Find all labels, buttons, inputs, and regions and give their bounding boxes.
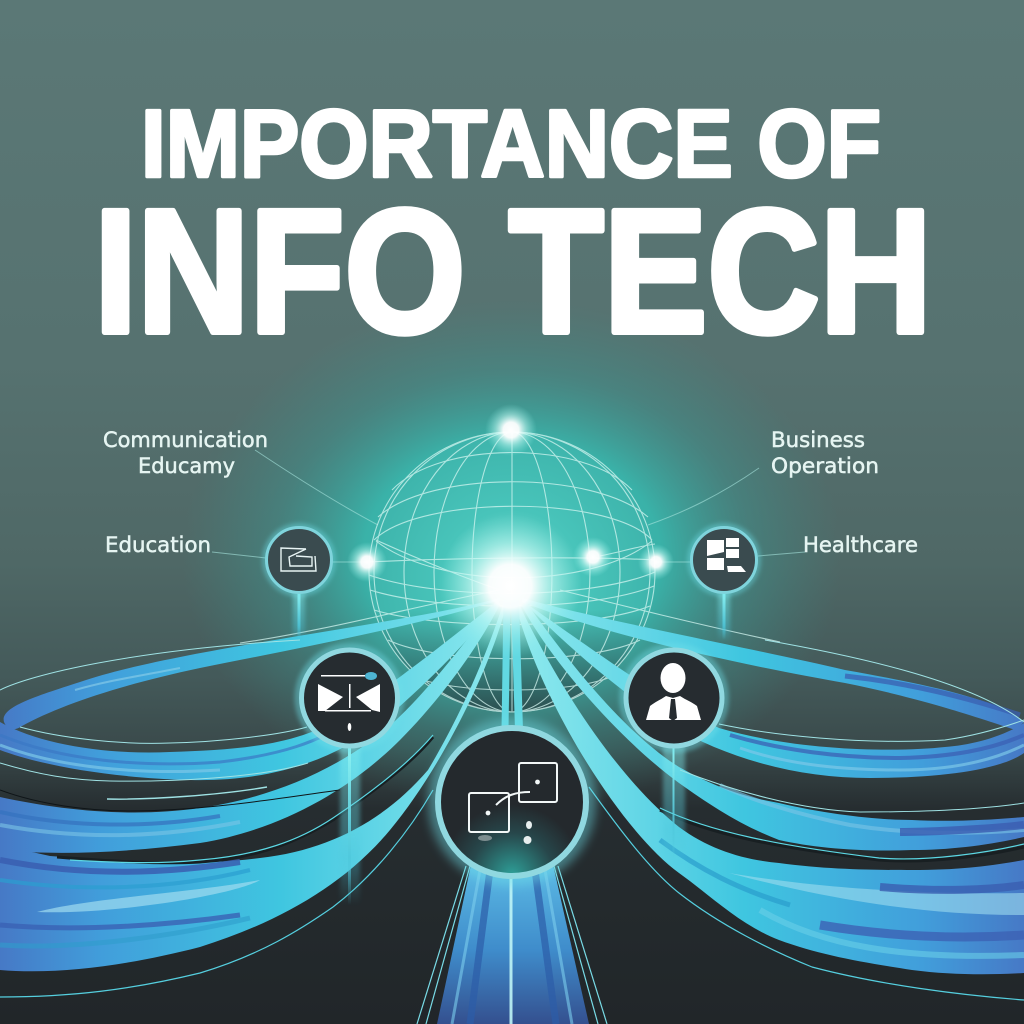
pin: healthcare: [718, 592, 730, 642]
ribbon streaks left: [0, 668, 350, 946]
label: Education: Education: [105, 533, 211, 557]
globe body: [369, 432, 655, 712]
icon: education document: [281, 548, 316, 571]
thin lines left: [0, 640, 433, 997]
fan body: [437, 860, 589, 1024]
pin: left node: [340, 745, 360, 905]
pin: right node: [663, 745, 685, 865]
icon: person in suit: [646, 663, 701, 721]
globe bottom fade: [369, 432, 655, 712]
ribbon streaks right: [660, 676, 1024, 956]
title line 2: INFO TECH: [94, 174, 932, 370]
lower left ribbons: [0, 598, 506, 997]
title: [94, 90, 932, 370]
hub flare: [438, 514, 582, 658]
label: Business: Business: [771, 428, 865, 452]
icon: window grid: [707, 538, 746, 572]
icon node: communication: [294, 643, 404, 753]
ribbon: lower-left band: [0, 604, 506, 971]
ribbon: lower-right band: [516, 606, 1024, 974]
node: left: [347, 542, 387, 582]
icon: connected squares: [469, 763, 557, 844]
title line 1: IMPORTANCE OF: [141, 90, 881, 198]
ribbon: upper-right arc: [522, 598, 1024, 730]
center rays from hub: [505, 600, 519, 730]
icon node: healthcare: [687, 523, 761, 597]
pin: education: [293, 592, 305, 642]
label: Operation: Operation: [771, 454, 879, 478]
label: Communication: Communication: [103, 428, 268, 452]
icon node: business person: [619, 643, 729, 753]
label: Healthcare: Healthcare: [803, 533, 918, 557]
node: top: [485, 404, 537, 456]
node: far right: [638, 544, 674, 580]
icon node: education: [262, 523, 336, 597]
center teal glow: [182, 300, 842, 810]
pin stems: [293, 592, 730, 905]
ribbon: upper-left loop body: [0, 600, 500, 780]
fan streaks: [417, 866, 607, 1024]
lower right ribbons: [516, 598, 1024, 1000]
leader lines: [212, 450, 805, 562]
ribbon: upper-right loop body: [524, 602, 1024, 778]
globe wireframe: [240, 432, 780, 712]
ribbon: middle-right band: [522, 602, 1024, 851]
labels: [103, 428, 918, 557]
icon node: center connection: [428, 718, 596, 886]
node: inner right: [573, 537, 613, 577]
icon: presentation board: [318, 672, 380, 731]
bottom center fan: [417, 860, 607, 1024]
globe: [240, 432, 780, 712]
globe nodes and hub flare: [347, 404, 674, 658]
ribbon: upper-left arc: [4, 598, 500, 729]
label: Educamy: Educamy: [138, 454, 235, 478]
thin lines right: [589, 640, 1024, 1000]
ribbon: middle-left band: [0, 600, 500, 853]
